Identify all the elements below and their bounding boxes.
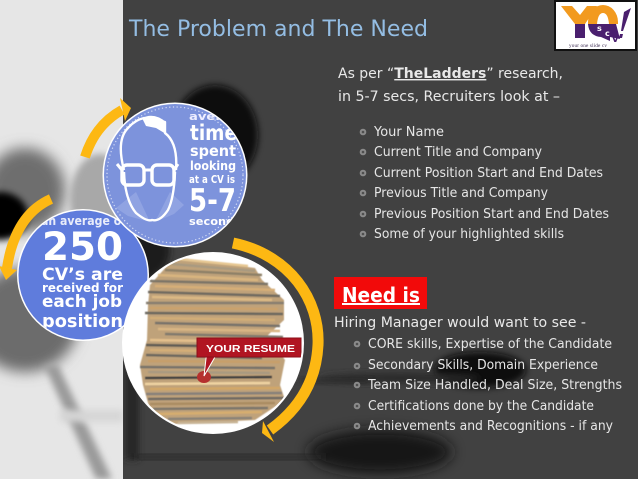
time text: average <box>189 110 249 123</box>
time text: time <box>190 121 237 145</box>
item: CORE skills, Expertise of the Candidate <box>368 337 612 352</box>
time text: spent <box>190 142 237 160</box>
infographic circle: 250 CVs: received for <box>42 280 124 295</box>
logo <box>555 1 636 50</box>
intro text: As per “TheLadders” research, <box>338 66 563 82</box>
intro text <box>338 66 563 105</box>
title: The Problem and The Need <box>128 16 428 42</box>
item: Certifications done by the Candidate <box>368 399 594 414</box>
need is label <box>334 277 427 309</box>
background: photo panel left <box>0 0 130 479</box>
item: Achievements and Recognitions - if any <box>368 419 613 434</box>
time text: seconds <box>189 215 241 228</box>
time text: at a CV is <box>189 174 235 186</box>
background: dark panel right <box>124 82 529 479</box>
intro text: in 5-7 secs, Recruiters look at – <box>338 89 560 105</box>
arrow: around resume circle <box>233 243 318 442</box>
hiring manager heading: Hiring Manager would want to see - <box>334 315 586 331</box>
logo: v <box>612 34 619 45</box>
item: Your Name <box>373 125 444 140</box>
arrow: to time circle <box>85 98 131 157</box>
label: your resume: YOUR RESUME <box>206 343 295 355</box>
logo: your one slide cv <box>569 43 607 49</box>
icon: man with glasses <box>117 118 178 220</box>
infographic circle: 250 CVs: each job <box>42 292 122 312</box>
item: Current Position Start and End Dates <box>374 166 603 181</box>
arrow: to 250 circle <box>0 199 51 280</box>
infographic circle: 250 CVs: 250 <box>42 225 123 270</box>
label: your resume <box>197 338 301 357</box>
infographic circle: 250 CVs: position <box>42 311 123 332</box>
photo circle: stack of resumes <box>122 252 304 434</box>
item: Current Title and Company <box>374 145 542 160</box>
item: Team Size Handled, Deal Size, Strengths <box>367 378 622 393</box>
time text: looking <box>190 158 236 173</box>
time text: 5-7 <box>189 183 236 219</box>
item: Previous Title and Company <box>374 186 548 201</box>
item: Secondary Skills, Domain Experience <box>368 358 598 373</box>
infographic circle: time spent <box>102 102 249 248</box>
time text <box>189 114 236 225</box>
logo: s <box>597 24 602 33</box>
infographic circle: 250 CVs: CV’s are <box>42 265 123 285</box>
bullet list: what recruiters look at <box>360 125 609 242</box>
infographic circle: 250 CVs: an average of <box>41 214 127 228</box>
need is label: Need is <box>342 283 420 307</box>
item: Some of your highlighted skills <box>374 227 564 242</box>
logo: c <box>605 29 610 38</box>
infographic circle: 250 CVs <box>17 209 149 341</box>
paper stack <box>140 257 285 424</box>
bullet list: hiring manager wants <box>354 337 622 434</box>
item: Previous Position Start and End Dates <box>374 207 609 222</box>
